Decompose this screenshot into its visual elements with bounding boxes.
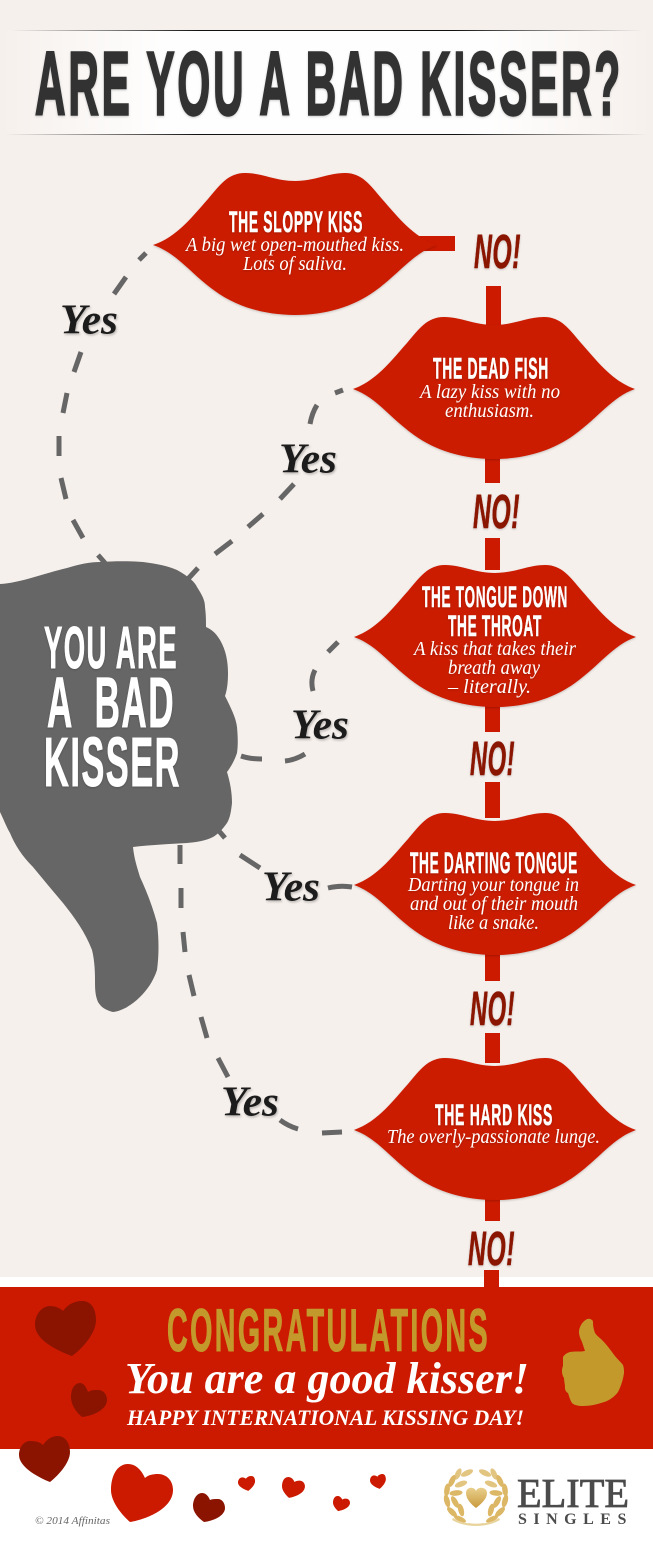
dashed path: tongue down the throat to thumb bbox=[241, 642, 338, 761]
connector bars between lips bbox=[419, 236, 501, 1288]
icon: laurel wreath bbox=[443, 1467, 509, 1526]
lips: the dead fish bbox=[353, 317, 635, 459]
heart 4 bbox=[111, 1464, 173, 1522]
no labels: NO! bbox=[468, 1223, 515, 1276]
yes labels: Yes bbox=[221, 1080, 279, 1126]
text: the tongue down the throat: THE THROAT bbox=[448, 610, 542, 643]
no labels: NO! bbox=[473, 486, 520, 539]
lips: the hard kiss bbox=[354, 1058, 636, 1200]
heart 3 bbox=[19, 1436, 70, 1482]
heart 8 bbox=[333, 1496, 350, 1511]
text: the darting tongue: Darting your tongue in bbox=[407, 874, 579, 896]
text: the dead fish: A lazy kiss with no bbox=[418, 381, 560, 403]
no labels: NO! bbox=[470, 983, 515, 1036]
heart 7 bbox=[282, 1477, 305, 1498]
dashed path: dead fish to thumb bbox=[187, 390, 343, 580]
icon: gold heart bbox=[466, 1488, 487, 1508]
verdict text: A BAD bbox=[47, 664, 175, 743]
thumbs down with verdict: YOU ARE bbox=[44, 615, 178, 681]
kissing day line: HAPPY INTERNATIONAL KISSING DAY! bbox=[126, 1405, 524, 1430]
text: the tongue down the throat: breath away bbox=[448, 657, 541, 679]
text: the dead fish: enthusiasm. bbox=[445, 400, 534, 422]
singles wordmark: SINGLES bbox=[518, 1511, 633, 1528]
no labels bbox=[468, 226, 521, 1276]
text: the hard kiss: The overly-passionate lunge. bbox=[387, 1126, 600, 1148]
text: the hard kiss bbox=[387, 1099, 600, 1148]
dashed path: darting tongue to thumb bbox=[219, 831, 352, 888]
yes labels: Yes bbox=[60, 298, 118, 344]
lips: the darting tongue bbox=[354, 813, 636, 955]
thumbs down with verdict bbox=[0, 561, 238, 1012]
hearts bbox=[19, 1301, 386, 1522]
text: the sloppy kiss: THE SLOPPY KISS bbox=[229, 206, 363, 239]
dashed path: hard kiss to thumb bbox=[180, 845, 342, 1133]
lips: the sloppy kiss bbox=[153, 173, 437, 315]
elite singles logo bbox=[443, 1467, 633, 1528]
yes labels: Yes bbox=[279, 436, 337, 482]
heart 6 bbox=[238, 1476, 255, 1491]
text: the darting tongue: like a snake. bbox=[448, 912, 539, 934]
copyright: © 2014 Affinitas bbox=[35, 1515, 110, 1527]
yes labels: Yes bbox=[291, 702, 349, 748]
yes labels bbox=[60, 298, 349, 1126]
congratulations banner bbox=[0, 1287, 653, 1449]
no labels: NO! bbox=[470, 733, 515, 786]
heart 9 bbox=[370, 1474, 386, 1489]
text: the darting tongue bbox=[407, 847, 579, 934]
text: the sloppy kiss bbox=[184, 206, 404, 275]
heart 1 bbox=[35, 1301, 96, 1356]
text: the sloppy kiss: Lots of saliva. bbox=[242, 253, 347, 275]
icon: thumbs down bbox=[0, 561, 238, 1012]
verdict text bbox=[44, 615, 181, 801]
heart 2 bbox=[71, 1383, 107, 1417]
good kisser line: You are a good kisser! bbox=[125, 1354, 529, 1403]
title banner bbox=[0, 30, 653, 135]
no labels: NO! bbox=[474, 226, 521, 279]
text: the dead fish bbox=[418, 352, 560, 422]
text: the tongue down the throat: – literally. bbox=[447, 676, 531, 698]
dashed path: sloppy kiss to thumb bbox=[59, 253, 146, 563]
heart 5 bbox=[193, 1493, 225, 1522]
text: the tongue down the throat bbox=[412, 581, 577, 698]
yes labels: Yes bbox=[262, 864, 320, 910]
text: the tongue down the throat: A kiss that takes their bbox=[412, 638, 577, 660]
lips: the tongue down the throat bbox=[354, 565, 636, 707]
icon: thumbs up bbox=[562, 1319, 624, 1406]
elite wordmark: ELITE bbox=[517, 1470, 629, 1516]
text: the sloppy kiss: A big wet open-mouthed kiss. bbox=[184, 234, 404, 256]
text: the darting tongue: and out of their mouth bbox=[410, 893, 578, 915]
thumbs down with verdict: KISSER bbox=[44, 723, 181, 801]
